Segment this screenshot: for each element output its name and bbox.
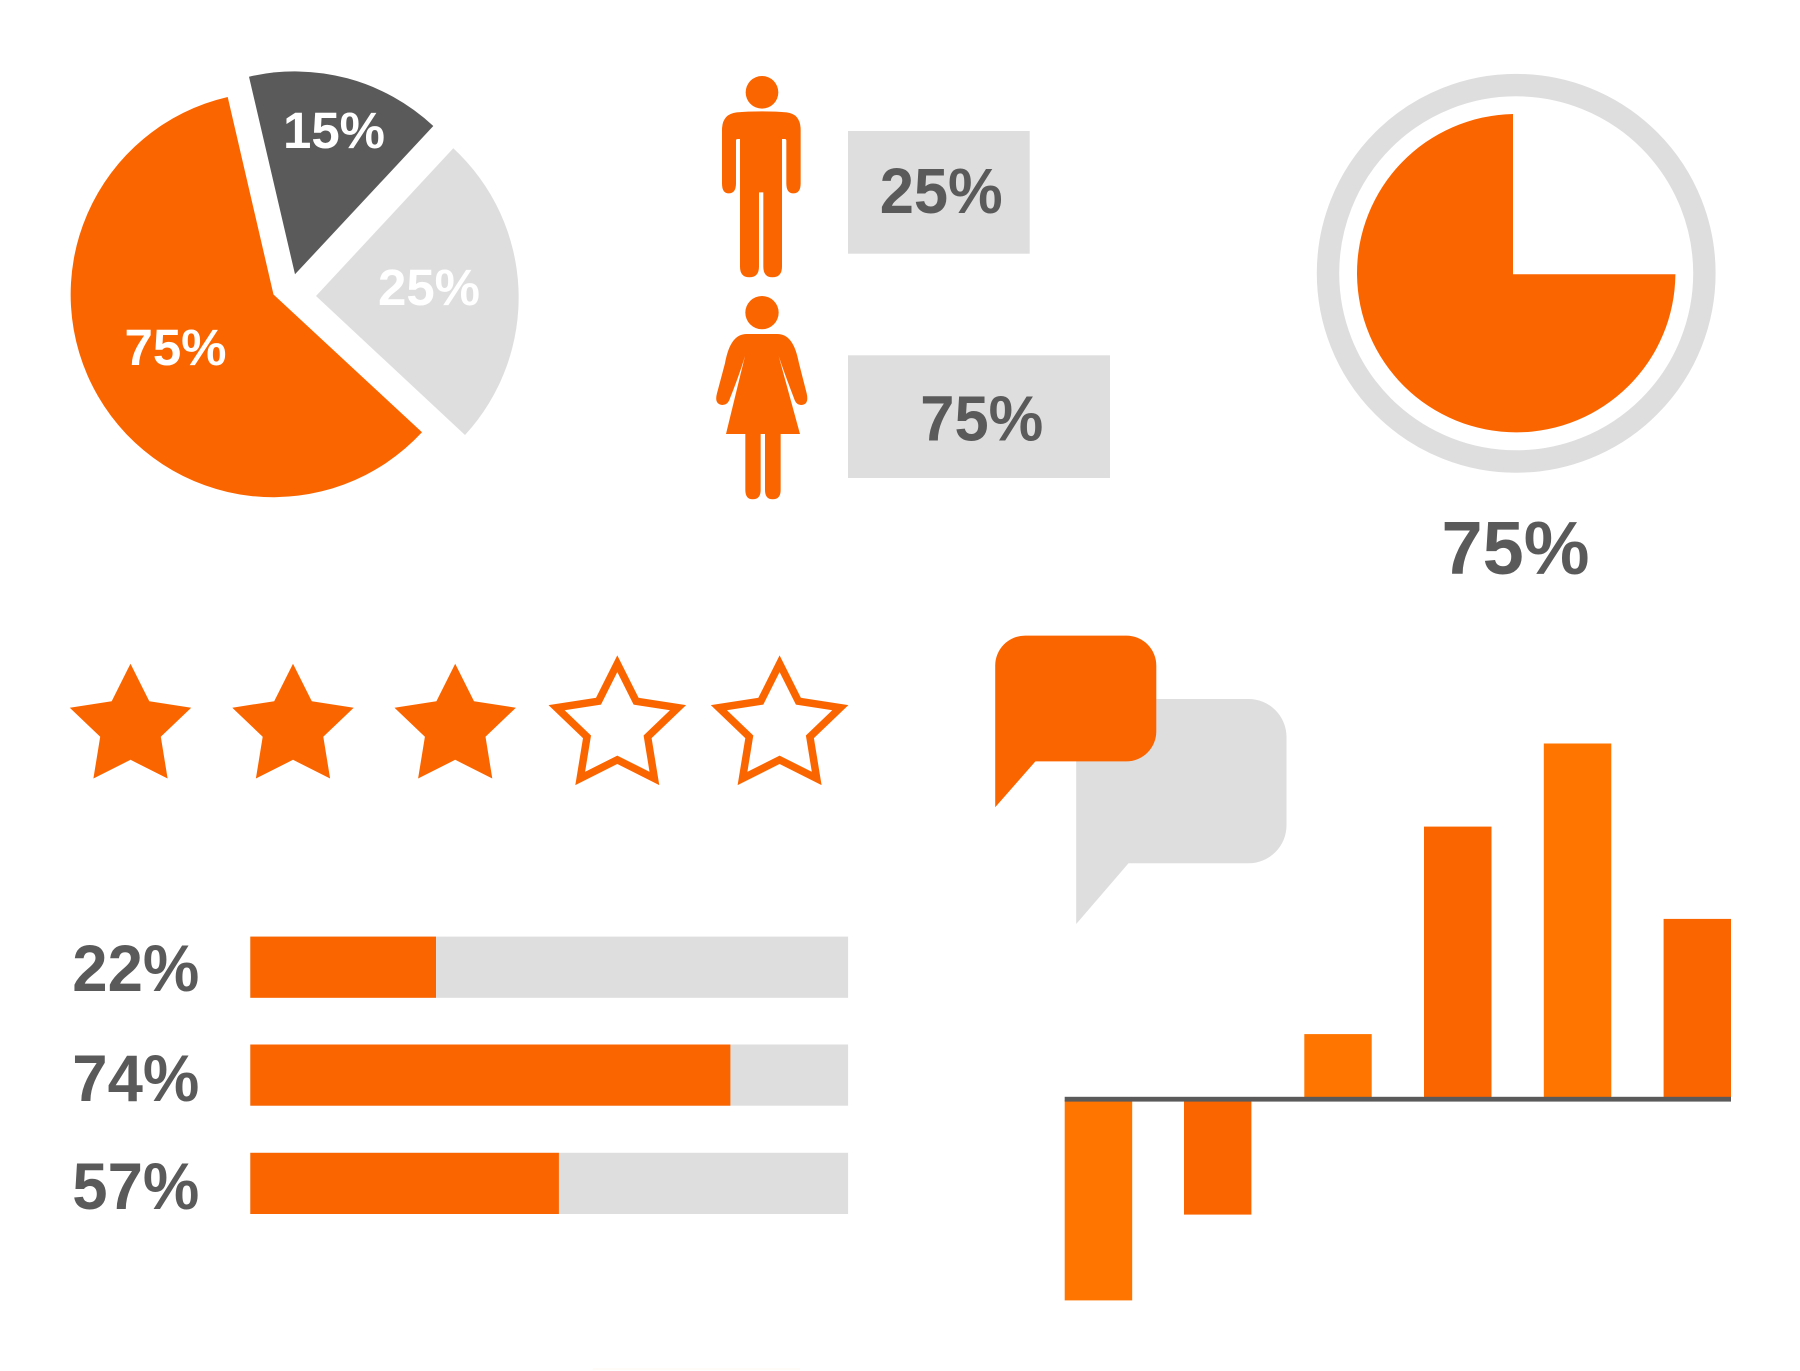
icon: man bbox=[722, 76, 801, 277]
man value box bbox=[848, 131, 1030, 254]
pie slice: dark 15%: 15% bbox=[283, 102, 385, 159]
column 6 bbox=[1664, 919, 1731, 1100]
panel: horizontal progress bars bbox=[72, 931, 848, 1223]
gauge fill three quarters bbox=[1357, 114, 1675, 432]
panel: ring gauge bbox=[1328, 85, 1704, 590]
icon: filled star 1 bbox=[70, 664, 191, 778]
column 1 negative bbox=[1065, 1100, 1132, 1300]
pie slice: dark 15% bbox=[249, 71, 433, 274]
column 3 bbox=[1304, 1034, 1372, 1100]
panel: speech bubbles bbox=[995, 636, 1286, 924]
icon: orange speech bubble bbox=[995, 636, 1156, 807]
progress bar 74%: 74% bbox=[72, 1041, 199, 1115]
pie slice: light 25% bbox=[316, 148, 519, 435]
woman value box bbox=[848, 355, 1110, 478]
icon: grey speech bubble bbox=[1076, 699, 1286, 924]
panel: column chart bbox=[1065, 744, 1731, 1300]
progress bar 22%: 22% bbox=[72, 931, 199, 1005]
icon: filled star 2 bbox=[232, 664, 354, 778]
pie slice: orange 75%: 75% bbox=[124, 319, 227, 376]
column 2 negative bbox=[1184, 1100, 1251, 1215]
progress bar 57% bbox=[72, 1149, 848, 1223]
gauge value: 75% bbox=[1442, 506, 1590, 590]
pie slice: light 25%: 25% bbox=[378, 259, 480, 316]
progress bar 22% bbox=[72, 931, 848, 1005]
column 4 bbox=[1424, 827, 1492, 1100]
progress bar 74% bbox=[72, 1041, 848, 1115]
icon: outline star 5 bbox=[719, 664, 840, 778]
gauge ring bbox=[1328, 85, 1704, 462]
pie slice: orange 75% bbox=[71, 97, 422, 497]
progress bar 57%: 57% bbox=[72, 1149, 199, 1223]
chart axis bbox=[1065, 1097, 1731, 1102]
man value box: 25% bbox=[880, 155, 1003, 227]
icon: outline star 4 bbox=[557, 664, 678, 778]
icon: filled star 3 bbox=[394, 664, 516, 778]
icon: woman bbox=[716, 296, 807, 499]
column 5 bbox=[1544, 744, 1611, 1100]
panel: exploded pie chart bbox=[71, 71, 519, 497]
panel: gender split bbox=[716, 76, 1110, 499]
woman value box: 75% bbox=[920, 382, 1043, 454]
panel: star rating bbox=[70, 664, 840, 778]
